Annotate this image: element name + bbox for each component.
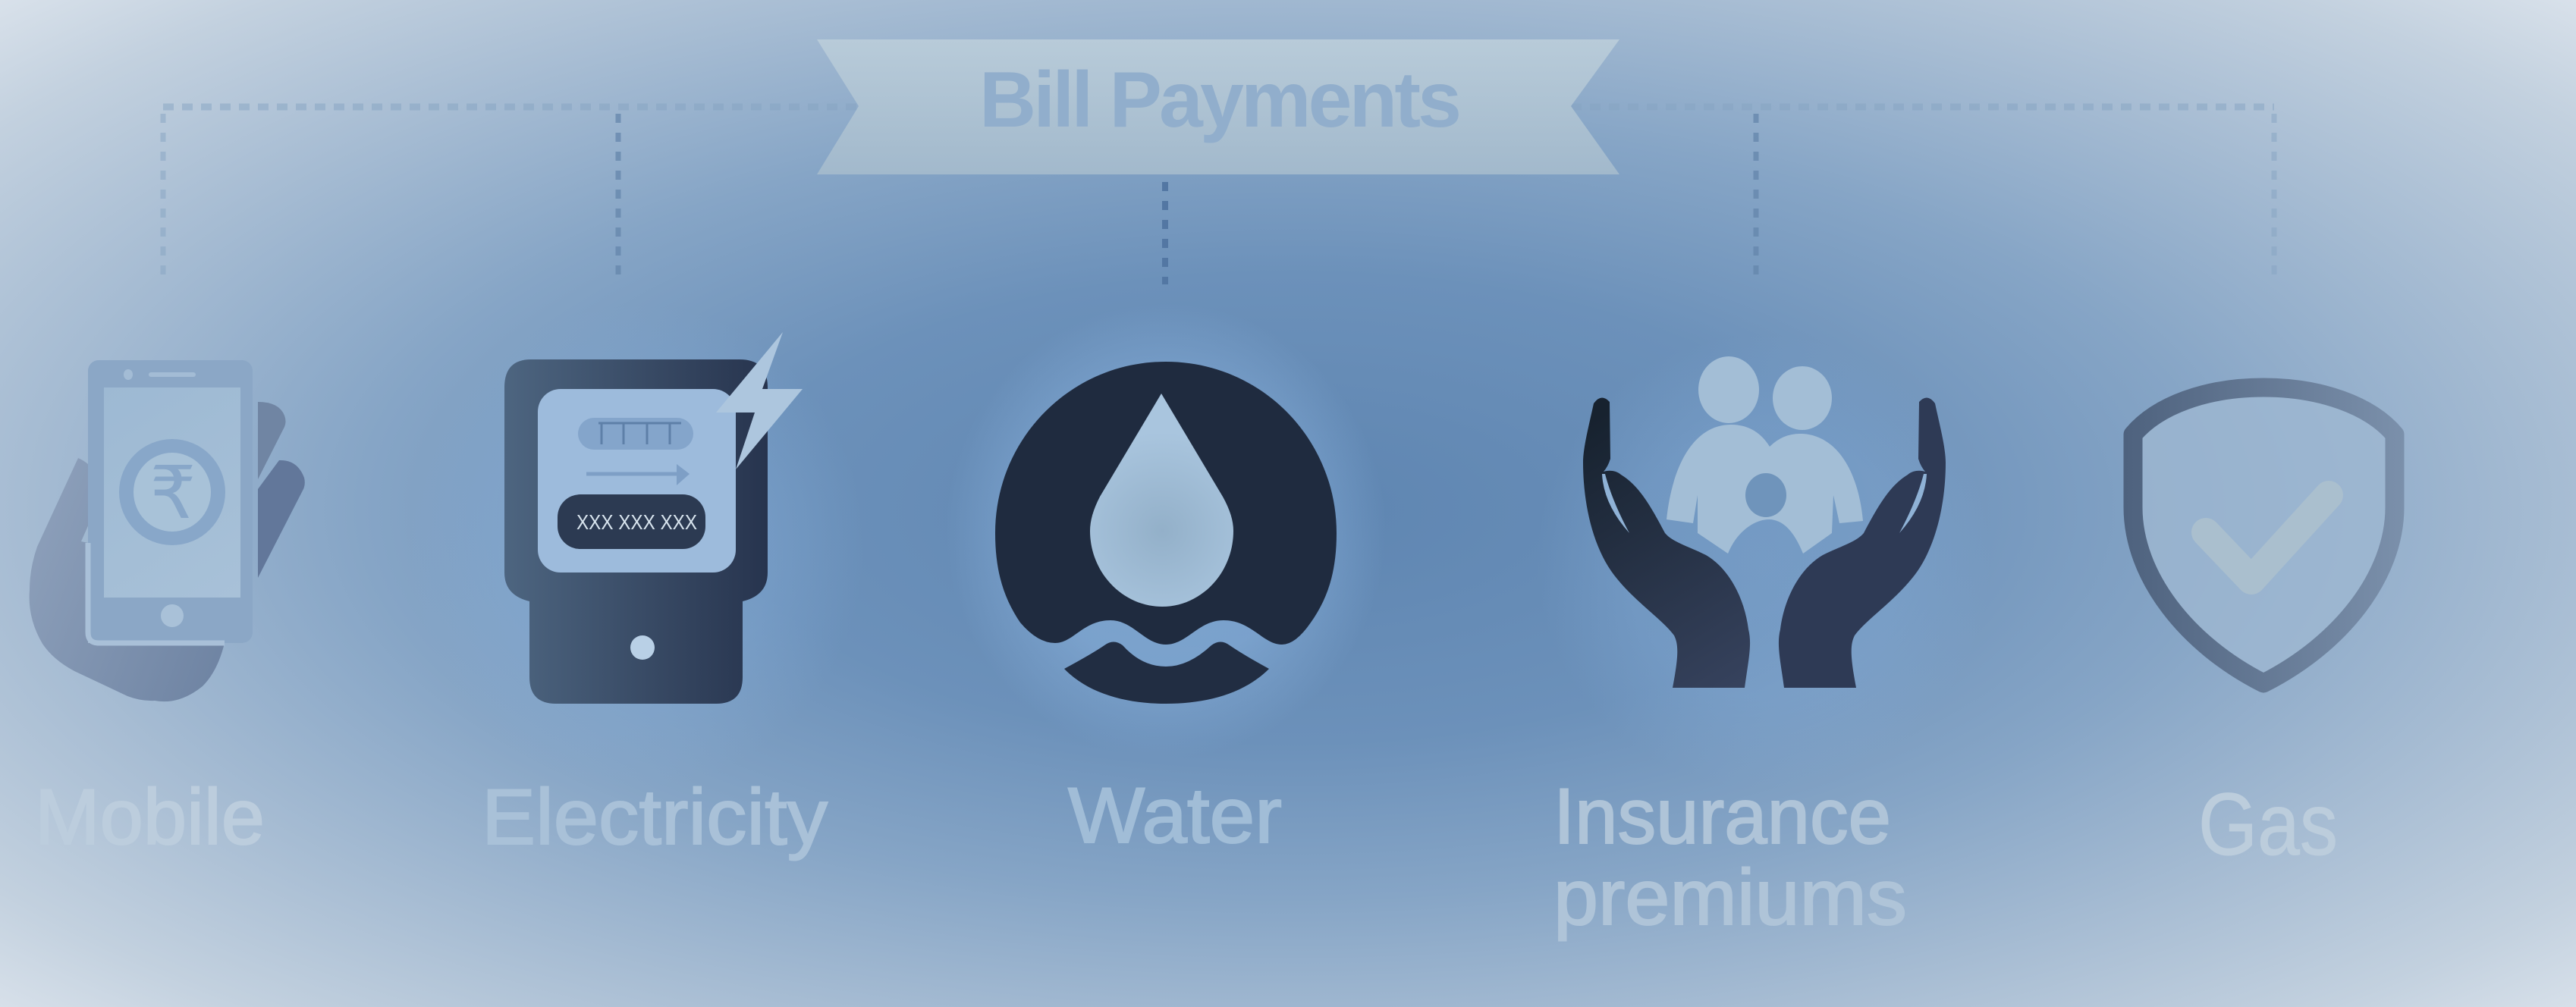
item: insurance premiums bbox=[1553, 356, 1946, 942]
icon: shield with check bbox=[2133, 387, 2395, 683]
icon: hand holding phone: ₹ bbox=[149, 450, 196, 535]
icon: electric meter bbox=[504, 332, 803, 704]
label: Insurance premiums: Insurance bbox=[1553, 773, 1891, 861]
icon: hands protecting family bbox=[1583, 356, 1946, 688]
icon: hand holding phone bbox=[30, 360, 305, 701]
item: gas bbox=[2133, 387, 2395, 874]
label: Electricity: Electricity bbox=[482, 773, 828, 861]
icon: electric meter: XXX XXX XXX bbox=[576, 510, 697, 534]
heading: Bill Payments: Bill Payments bbox=[979, 56, 1462, 144]
item: water bbox=[995, 362, 1337, 860]
label: Gas: Gas bbox=[2198, 775, 2338, 874]
icon: water drop bbox=[995, 362, 1337, 704]
banner bbox=[817, 39, 1619, 174]
item: mobile bbox=[30, 360, 305, 861]
label: Water: Water bbox=[1068, 772, 1282, 860]
label: Insurance premiums bbox=[1553, 773, 1907, 942]
label: Insurance premiums: premiums bbox=[1553, 854, 1907, 942]
item: electricity bbox=[482, 332, 828, 861]
label: Mobile: Mobile bbox=[35, 773, 265, 861]
connector: dotted lines bbox=[163, 107, 2274, 284]
